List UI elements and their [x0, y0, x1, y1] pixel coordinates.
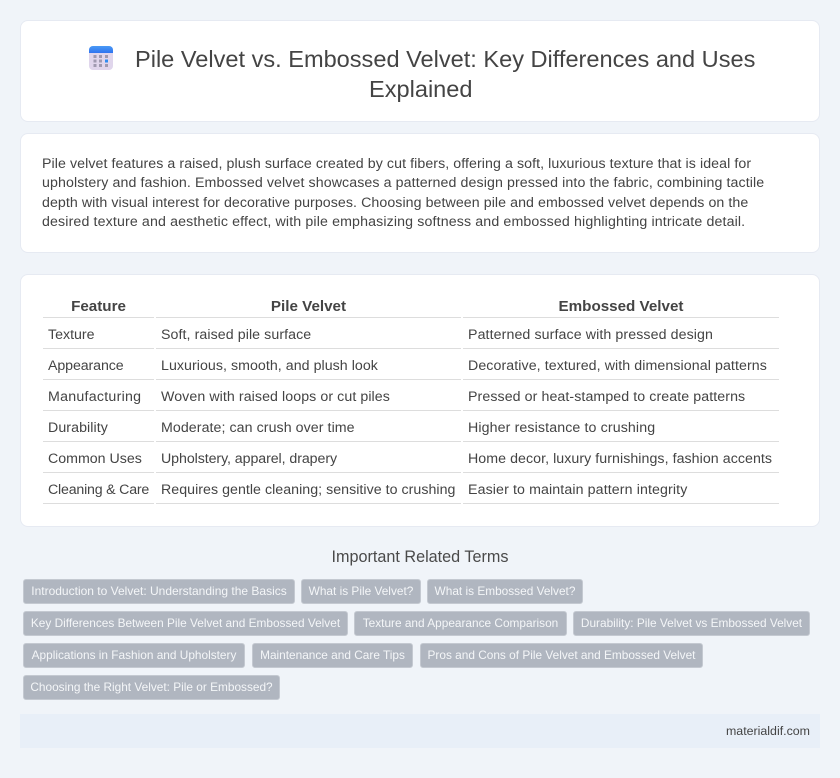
row: appearance: Appearance: [48, 358, 124, 374]
tag group: related terms: Introduction to Velvet: Understanding the Basics: [31, 584, 287, 598]
row: cleaning and care: Cleaning & Care: [48, 482, 149, 498]
row: texture: Texture: [48, 327, 95, 343]
row: appearance: Luxurious, smooth, and plush look: [161, 358, 378, 374]
tag group: related terms: Key Differences Between Pile Velvet and Embossed Velvet: [31, 616, 340, 630]
text: description: depth with visual interest for decorative purposes. Choosing between pile and embossed velvet depends on the: [42, 194, 748, 210]
icon: calendar: [89, 46, 113, 70]
row: durability: Moderate; can crush over time: [161, 420, 355, 436]
table header: Feature: [71, 298, 126, 315]
panel: comparison table: [20, 274, 820, 527]
text: description: [42, 156, 764, 230]
title: Explained: [369, 76, 472, 102]
row: common uses: [48, 451, 772, 467]
row: common uses: Upholstery, apparel, drapery: [161, 451, 337, 467]
tag group: related terms: Maintenance and Care Tips: [260, 648, 405, 662]
row: durability: [48, 420, 655, 436]
text: description: desired texture and aesthetic effect, with pile emphasizing softness and embossed highlighting intricate detail.: [42, 214, 745, 230]
row: durability: Durability: [48, 420, 108, 436]
tag group: related terms: Texture and Appearance Comparison: [363, 616, 558, 630]
tag group: related terms: Durability: Pile Velvet vs Embossed Velvet: [581, 616, 802, 630]
row: texture: Patterned surface with pressed design: [468, 327, 713, 343]
panel: description: [20, 133, 820, 253]
row: durability: Higher resistance to crushing: [468, 420, 655, 436]
tag group: related terms: What is Embossed Velvet?: [435, 584, 575, 598]
text: description: Pile velvet features a raised, plush surface created by cut fibers, offering a soft, luxurious texture that is ideal for: [42, 156, 751, 172]
row: cleaning and care: Easier to maintain pattern integrity: [468, 482, 687, 498]
tag group: related terms: Pros and Cons of Pile Velvet and Embossed Velvet: [428, 648, 695, 662]
table header: [71, 298, 684, 315]
row: manufacturing: Manufacturing: [48, 389, 141, 405]
row: texture: Soft, raised pile surface: [161, 327, 311, 343]
footer bar: [20, 714, 820, 748]
footer credit: materialdif.com: [726, 724, 810, 738]
row: common uses: Common Uses: [48, 451, 142, 467]
table header: Pile Velvet: [271, 298, 346, 315]
heading: related terms: Important Related Terms: [332, 548, 508, 566]
row: appearance: [48, 358, 767, 374]
row: manufacturing: Woven with raised loops or cut piles: [161, 389, 390, 405]
panel: header: [20, 20, 820, 122]
title: Pile Velvet vs. Embossed Velvet: Key Differences and Uses: [135, 46, 755, 72]
row: texture: [48, 327, 713, 343]
title: [135, 46, 755, 102]
tag group: related terms: Choosing the Right Velvet: Pile or Embossed?: [30, 680, 273, 694]
text: description: upholstery and fashion. Embossed velvet showcases a patterned design pressed into the fabric, combining tactile: [42, 174, 764, 190]
tag group: related terms: What is Pile Velvet?: [309, 584, 413, 598]
row: manufacturing: Pressed or heat-stamped to create patterns: [468, 389, 745, 405]
row: cleaning and care: [48, 482, 688, 498]
row: common uses: Home decor, luxury furnishings, fashion accents: [468, 451, 772, 467]
table header: Embossed Velvet: [559, 298, 683, 315]
row: appearance: Decorative, textured, with dimensional patterns: [468, 358, 767, 374]
tag group: related terms: Applications in Fashion and Upholstery: [32, 648, 236, 662]
row: manufacturing: [48, 389, 745, 405]
row: cleaning and care: Requires gentle cleaning; sensitive to crushing: [161, 482, 455, 498]
tag group: related terms: [23, 579, 810, 700]
